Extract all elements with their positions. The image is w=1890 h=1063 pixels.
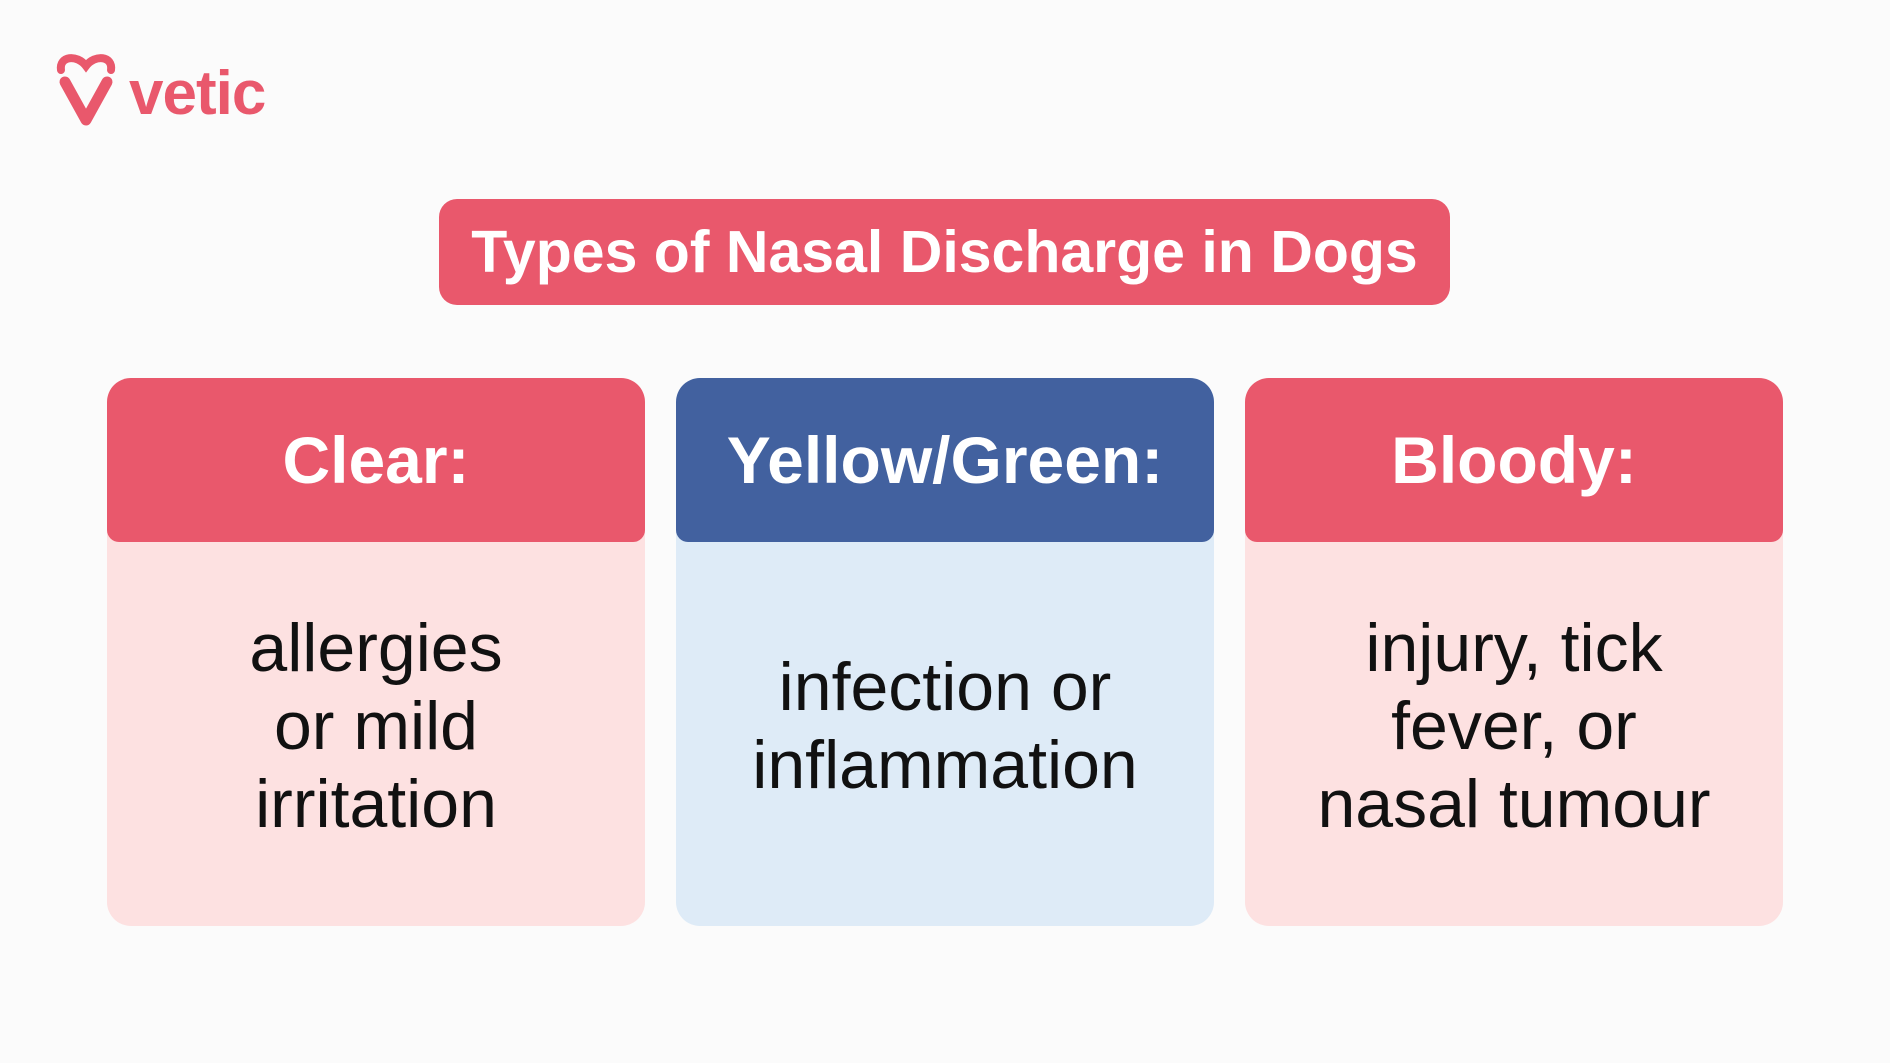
title: Types of Nasal Discharge in Dogs [471, 219, 1418, 285]
text: clear [249, 610, 503, 842]
panel: yellow/green [676, 378, 1214, 926]
text: yellow/green [752, 649, 1138, 803]
text: bloody [1317, 610, 1711, 842]
logo [56, 54, 265, 128]
text: bloody: nasal tumour [1317, 766, 1711, 842]
header: clear [107, 378, 645, 542]
text: clear: irritation [255, 766, 497, 842]
header: clear: Clear: [282, 423, 470, 497]
header: yellow/green [676, 378, 1214, 542]
header: bloody [1245, 378, 1783, 542]
panel: clear [107, 378, 645, 926]
logo text: vetic [129, 59, 265, 128]
text: yellow/green: infection or [779, 649, 1111, 725]
text: clear: or mild [274, 688, 478, 764]
text: bloody: fever, or [1391, 688, 1637, 764]
text: yellow/green: inflammation [752, 727, 1138, 803]
header: bloody: Bloody: [1391, 423, 1637, 497]
text: clear: allergies [249, 610, 503, 686]
title [439, 199, 1450, 305]
panel: bloody [1245, 378, 1783, 926]
text: bloody: injury, tick [1365, 610, 1663, 686]
header: yellow/green: Yellow/Green: [727, 423, 1163, 497]
icon: heart V [56, 54, 116, 126]
